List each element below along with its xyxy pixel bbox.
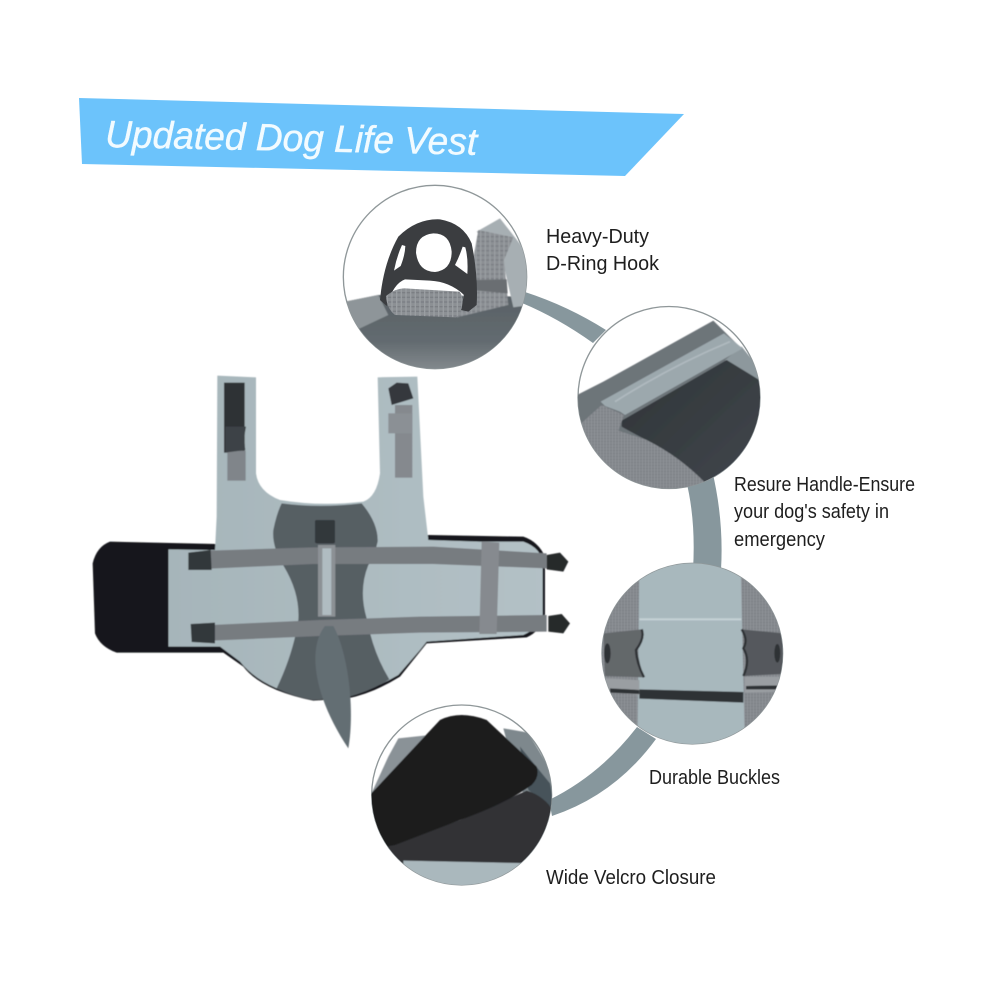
product image: dog life vest	[93, 376, 570, 748]
right strap buckle	[388, 383, 413, 405]
right side band	[725, 346, 758, 380]
vest dark centre panel	[273, 503, 389, 700]
detail circle: rescue handle	[577, 306, 761, 490]
dark mesh velcro	[388, 790, 551, 864]
webbing loop	[386, 288, 462, 317]
left upper buckle	[188, 550, 212, 570]
handle band	[601, 333, 743, 415]
dark inner panel	[621, 360, 760, 482]
connector arc: D-ring to handle	[522, 292, 606, 343]
right grey patch	[503, 728, 557, 817]
light vest edge	[402, 860, 522, 885]
back panel	[477, 218, 530, 307]
label: D-ring hook	[546, 226, 660, 275]
D-ring on vest	[315, 520, 335, 543]
left strap buckle	[225, 427, 246, 453]
mesh background	[602, 578, 780, 726]
connector arc: buckles to velcro closure	[549, 727, 656, 816]
left strap webbing	[227, 451, 246, 481]
detail circle: durable buckles	[600, 560, 787, 750]
title banner	[79, 98, 684, 176]
black elastic strip	[639, 689, 743, 703]
detail circle: wide velcro closure	[367, 705, 557, 890]
upper belly strap	[210, 547, 547, 569]
label: rescue handle: your dog's safety in	[734, 501, 889, 523]
black velcro flap	[367, 715, 538, 850]
strap webbing	[457, 230, 513, 317]
detail circle: D-ring hook	[342, 184, 528, 370]
label: rescue handle	[734, 474, 915, 551]
label: D-ring hook: D-Ring Hook	[546, 253, 660, 275]
top handle	[318, 545, 335, 617]
vest black velcro panel	[96, 545, 168, 649]
right strap webbing	[395, 405, 412, 478]
mesh webbing	[582, 406, 704, 488]
vest surface	[348, 294, 522, 368]
left buckle	[603, 629, 644, 677]
label: wide velcro closure: Wide Velcro Closure	[546, 867, 716, 889]
label: rescue handle: emergency	[734, 529, 825, 551]
right buckle	[742, 629, 783, 676]
D-ring handle	[380, 219, 477, 312]
vest light body and shoulder straps	[168, 376, 543, 697]
infographic canvas	[79, 98, 914, 886]
tail fin	[315, 626, 351, 748]
cross strap	[479, 542, 499, 634]
grey vest shoulder	[578, 320, 736, 440]
connector arc: handle to buckles	[686, 470, 722, 570]
right upper buckle	[547, 553, 568, 572]
label: rescue handle: Resure Handle-Ensure	[734, 474, 915, 496]
vest outer wings	[93, 535, 545, 701]
label: D-ring hook: Heavy-Duty	[546, 226, 649, 248]
left lower buckle	[191, 623, 215, 643]
label: durable buckles: Durable Buckles	[649, 767, 780, 789]
left grey patch	[372, 735, 426, 792]
right lower buckle	[548, 614, 570, 633]
title text: Updated Dog Life Vest	[105, 114, 479, 164]
lower belly strap	[212, 615, 547, 641]
light centre panel	[637, 560, 745, 750]
left velcro strip	[224, 383, 245, 453]
